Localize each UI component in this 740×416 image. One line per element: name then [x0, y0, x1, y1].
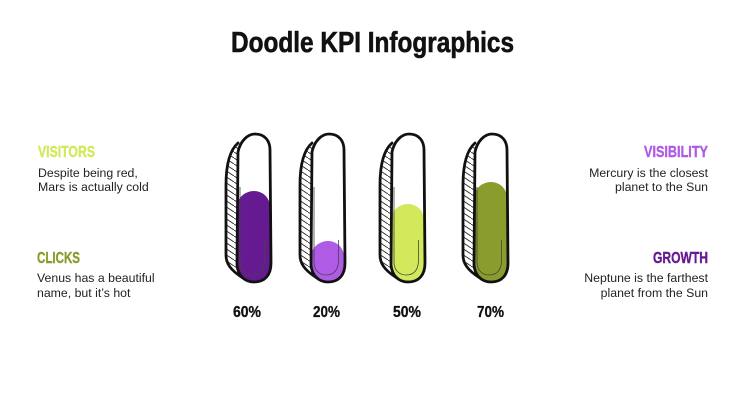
title: Doodle KPI Infographics	[231, 27, 514, 59]
left block: clicks	[37, 250, 155, 300]
heading: clicks: CLICKS	[37, 250, 80, 267]
value: 60%: 60%	[233, 304, 261, 321]
left block: visitors	[38, 144, 149, 194]
gauge: tube 70%	[463, 134, 508, 283]
value: 20%: 20%	[313, 304, 340, 321]
heading: growth: GROWTH	[653, 250, 708, 267]
text: clicks description: Venus has a beautiful	[37, 271, 155, 285]
text: visibility description: planet to the Sun	[615, 180, 708, 194]
text: visitors description: Despite being red,	[38, 166, 138, 180]
value: 50%: 50%	[393, 304, 421, 321]
heading: visitors: VISITORS	[38, 144, 95, 161]
text: clicks description: name, but it’s hot	[37, 286, 131, 300]
text: growth description: planet from the Sun	[601, 286, 708, 300]
gauge: tube 60%	[226, 134, 271, 283]
heading: visibility: VISIBILITY	[644, 144, 708, 161]
text: growth description: Neptune is the farthest	[584, 271, 709, 285]
right block: visibility	[589, 144, 709, 194]
right block: growth	[584, 250, 709, 300]
gauge: tube 20%	[300, 134, 345, 283]
value: 70%: 70%	[477, 304, 504, 321]
text: visibility description: Mercury is the closest	[589, 166, 709, 180]
gauge: tube 50%	[380, 134, 425, 283]
text: visitors description: Mars is actually cold	[38, 180, 149, 194]
